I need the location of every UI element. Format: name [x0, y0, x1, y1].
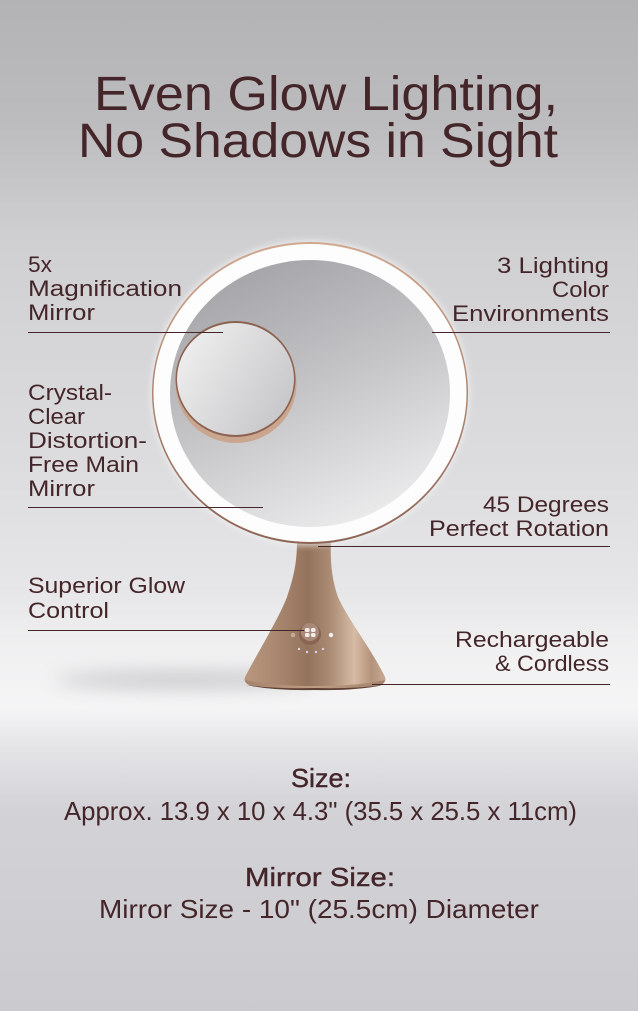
label: rotation: Perfect Rotation — [429, 516, 609, 541]
label: lighting: 3 Lighting — [497, 253, 609, 278]
labels: right — [318, 253, 610, 685]
label: main mirror: Clear — [28, 404, 85, 429]
size specification — [64, 763, 577, 826]
magnifying mirror — [176, 321, 296, 443]
size specification: Size: — [291, 763, 351, 793]
label: main mirror: Crystal- — [28, 380, 112, 405]
label: main mirror: Distortion- — [28, 428, 147, 453]
title: No Shadows in Sight — [78, 115, 558, 168]
control button — [291, 623, 333, 653]
label: magnification: Magnification — [28, 276, 182, 301]
label: rechargeable: & Cordless — [495, 651, 609, 676]
mirror size specification — [99, 862, 539, 924]
mirror stand — [245, 541, 385, 690]
size specification: Approx. 13.9 x 10 x 4.3" (35.5 x 25.5 x 11cm) — [64, 796, 577, 826]
label: magnification: 5x — [28, 252, 52, 277]
label: magnification: Mirror — [28, 300, 95, 325]
label: rotation — [318, 492, 610, 547]
label: rechargeable: Rechargeable — [455, 627, 609, 652]
label: main mirror: Mirror — [28, 476, 95, 501]
label: rechargeable — [372, 627, 610, 685]
table shadow — [55, 671, 315, 689]
label: lighting: Environments — [452, 301, 609, 326]
label: lighting: Color — [552, 277, 609, 302]
label: main mirror: Free Main — [28, 452, 139, 477]
label: main mirror — [28, 380, 263, 508]
title — [78, 68, 558, 168]
label: magnification — [28, 252, 223, 333]
label: glow control: Control — [28, 598, 109, 623]
mirror size specification: Mirror Size - 10" (25.5cm) Diameter — [99, 894, 539, 924]
label: lighting — [432, 253, 610, 333]
label: glow control — [28, 573, 304, 631]
labels: left — [28, 252, 304, 631]
title: Even Glow Lighting, — [94, 68, 558, 121]
label: glow control: Superior Glow — [28, 573, 185, 598]
label: rotation: 45 Degrees — [483, 492, 609, 517]
mirror size specification: Mirror Size: — [245, 862, 395, 892]
main mirror — [150, 240, 470, 546]
